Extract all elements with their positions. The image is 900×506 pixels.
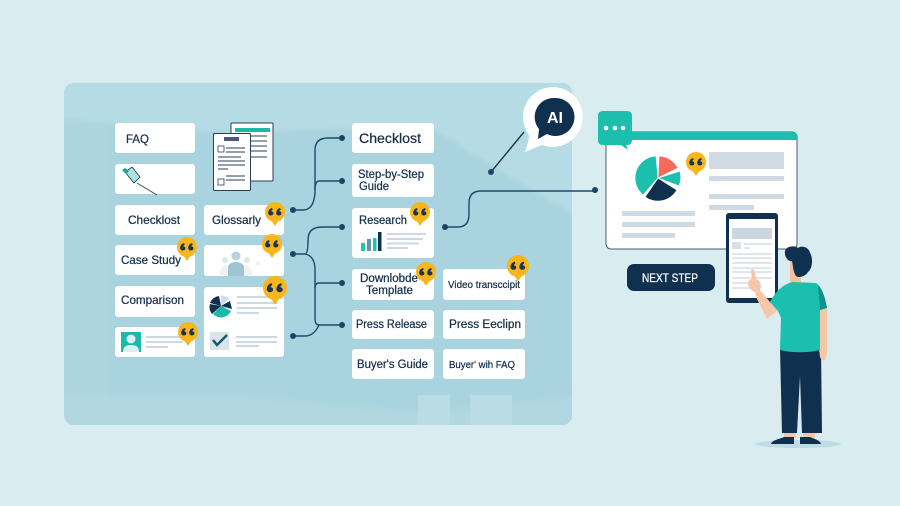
browser window: [606, 132, 797, 249]
card: Checklost right: Checklost: [359, 130, 421, 146]
button: next step: NEXT STEP: [642, 273, 698, 285]
infographic canvas: [64, 83, 841, 448]
card: Download Template: Downlobde: [360, 273, 418, 285]
card: Checklost: [115, 205, 195, 235]
card: Press Release: [352, 310, 434, 339]
card: Checklost right: [352, 123, 434, 153]
card: Press Eeclipn: [443, 310, 525, 339]
card: brush icon: [115, 164, 195, 195]
card: Research: Research: [359, 215, 407, 227]
card: Buyer's Guide: [352, 349, 434, 379]
card: profile: [115, 327, 195, 357]
card: Buyer's Guide: Buyer's Guide: [357, 359, 428, 371]
card: FAQ: [115, 123, 195, 153]
pie chart: [635, 156, 681, 201]
card: Buyer FAQ: [443, 349, 525, 379]
tablet: [726, 213, 778, 303]
icon: documents: [214, 123, 273, 190]
card: Comparison: Comparison: [121, 293, 184, 307]
card: Case Study: [115, 245, 195, 275]
panel: content library: [64, 83, 572, 425]
card: Step-by-Step Guide: [352, 164, 434, 197]
card: Comparison: [115, 286, 195, 317]
card: Case Study: Case Study: [121, 253, 181, 267]
card: Video transcript: [443, 269, 525, 300]
card: Press Release: Press Release: [356, 319, 427, 331]
icon: quote pins: [177, 202, 529, 346]
card: Step-by-Step Guide: Guide: [359, 181, 389, 193]
button: next step: [627, 264, 715, 291]
card: Research: [352, 208, 434, 258]
icon: chat bubble: [598, 111, 632, 150]
card: Checklost: Checklost: [128, 213, 181, 227]
text placeholder bars: [622, 152, 784, 238]
card: Buyer FAQ: Buyer' wih FAQ: [449, 359, 515, 371]
icon: AI speech bubble: AI: [547, 110, 563, 127]
icon: AI speech bubble: [523, 87, 583, 152]
person pointing at tablet: [748, 246, 841, 448]
card: chart and checkmark: [204, 287, 284, 357]
card: audience: [204, 245, 284, 276]
card: Video transcript: Video transccipit: [448, 280, 520, 291]
card: Step-by-Step Guide: Step-by-Step: [358, 169, 424, 181]
card: Glossarly: Glossarly: [212, 213, 261, 227]
card: Glossarly: [204, 205, 284, 235]
card: Press Eeclipn: Press Eeclipn: [449, 319, 521, 331]
card: Download Template: Template: [366, 285, 413, 297]
connector lines: [290, 132, 598, 339]
card: Download Template: [352, 269, 434, 300]
card: FAQ: FAQ: [126, 132, 149, 146]
